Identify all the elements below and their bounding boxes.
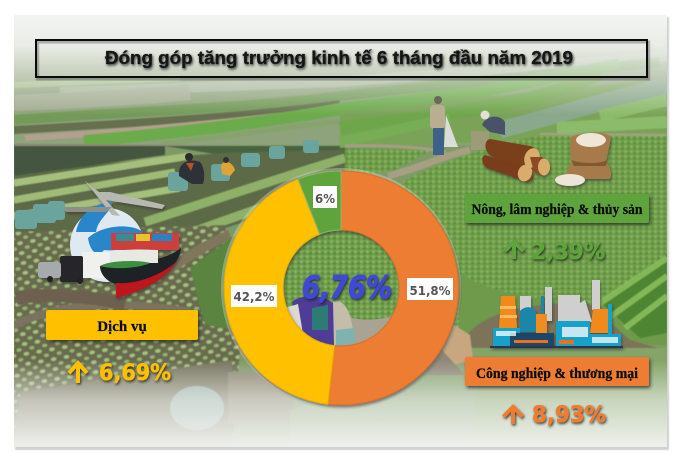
icon: transport (plane, globe, trucks, ship)	[38, 181, 181, 298]
value: services 6,69%	[69, 361, 171, 386]
label: industry and commerce: Công nghiệp & thương mại	[476, 366, 638, 382]
label 42,2%: 42,2%	[234, 290, 274, 304]
title box	[36, 40, 648, 79]
label 6%	[313, 186, 337, 208]
icon: logs	[482, 139, 550, 183]
bundles of vegetables	[15, 140, 319, 229]
photo inside donut hole	[280, 228, 402, 348]
label: services	[46, 310, 198, 340]
fog top and bottom	[14, 15, 667, 115]
standing farmers	[430, 96, 505, 155]
slice: agriculture 6%	[298, 171, 341, 234]
label: agriculture: Nông, lâm nghiệp & thủy sản	[472, 202, 643, 218]
label: agriculture	[465, 194, 649, 223]
value: agriculture 2,39%: 2,39%	[531, 240, 605, 265]
slice: services 42.2%	[224, 179, 334, 404]
label: services: Dịch vụ	[97, 319, 147, 335]
label 51,8%: 51,8%	[410, 284, 450, 298]
label 6%: 6%	[315, 192, 335, 206]
center total: 6,76%	[302, 270, 392, 306]
value: industry 8,93%: 8,93%	[532, 403, 606, 428]
donut slices	[224, 171, 458, 405]
icon: factory	[490, 280, 623, 348]
label 51,8%	[407, 278, 453, 300]
label: industry and commerce	[465, 357, 649, 386]
title box: Đóng góp tăng trưởng kinh tế 6 tháng đầu năm 2019	[105, 47, 573, 68]
kneeling farmers	[179, 153, 235, 184]
label 42,2%	[231, 285, 277, 307]
slice: industry and commerce 51.8%	[328, 171, 458, 405]
value: services 6,69%: 6,69%	[99, 361, 171, 386]
donut chart	[221, 168, 461, 408]
icon: rice sack	[555, 133, 611, 186]
